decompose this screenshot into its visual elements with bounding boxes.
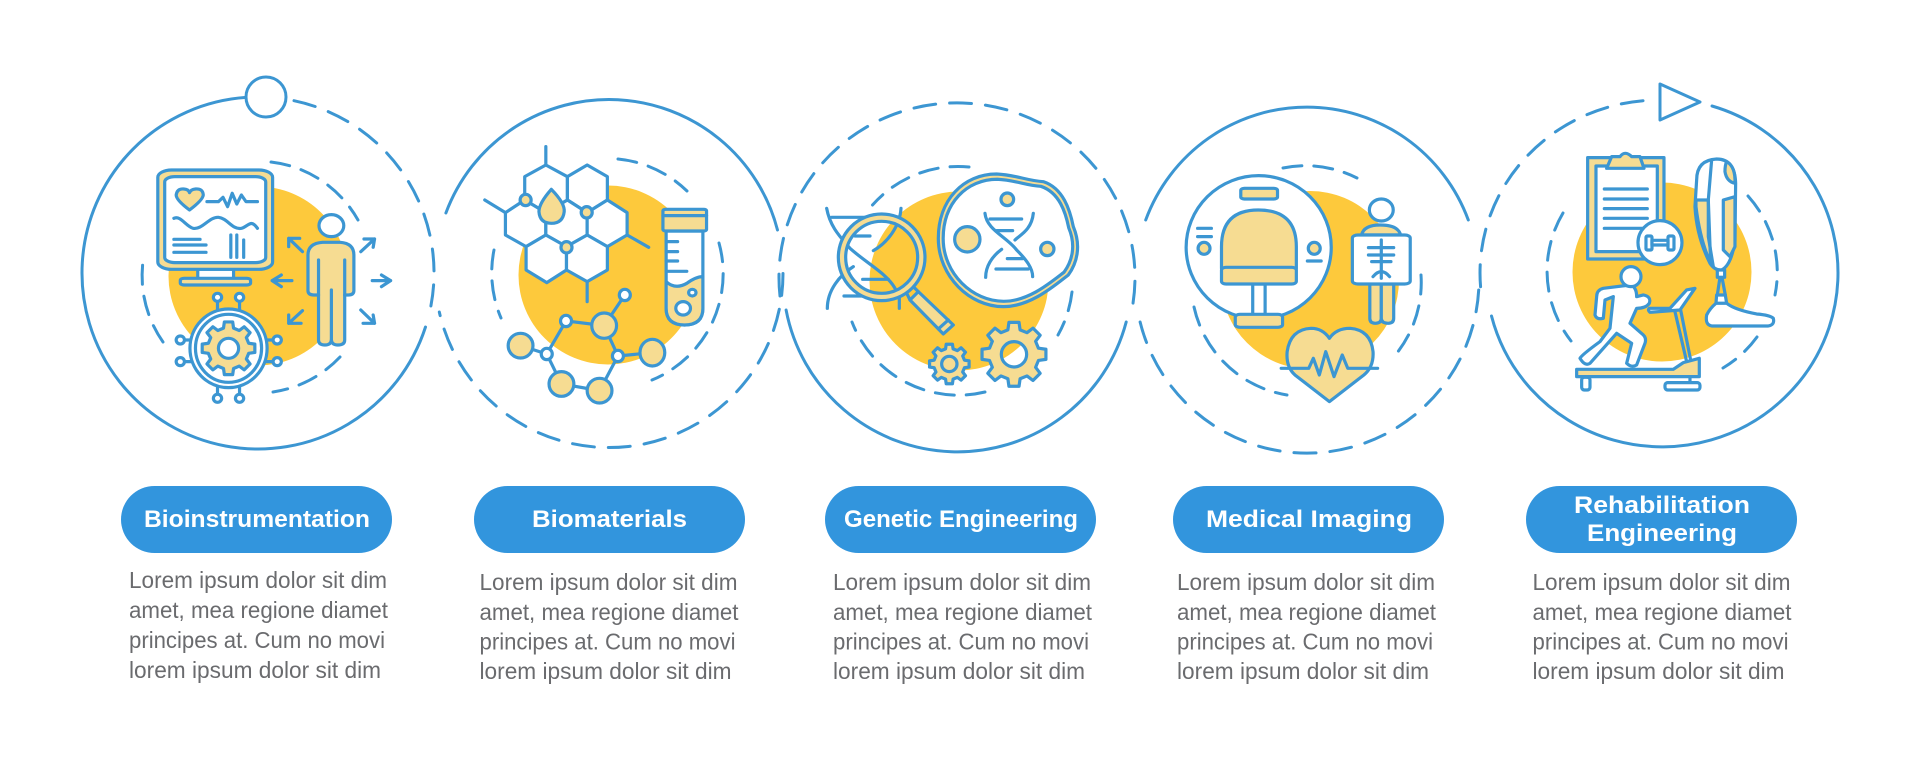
icon: hexagon lattice <box>485 147 649 302</box>
icon: clipboard, treadmill and prosthesis <box>1577 153 1774 390</box>
icon: treadmill runner <box>1577 267 1700 390</box>
end marker triangle <box>1660 84 1700 120</box>
outer ring <box>82 97 434 449</box>
text block: Genetic Engineering <box>833 569 1092 684</box>
yellow blob <box>518 186 698 364</box>
text block: Medical Imaging: lorem ipsum dolor sit dim <box>1177 658 1429 684</box>
heading: Genetic Engineering <box>825 486 1096 553</box>
panel: medical imaging circle <box>1140 107 1479 453</box>
heading: Bioinstrumentation <box>121 486 392 553</box>
heading: Rehabilitation Engineering: Engineering <box>1587 520 1737 547</box>
heading: Rehabilitation Engineering <box>1526 486 1797 553</box>
text block: Rehabilitation Engineering <box>1532 569 1792 684</box>
inner dashed ring <box>142 162 358 392</box>
text block: Genetic Engineering: Lorem ipsum dolor sit dim <box>833 569 1091 595</box>
outer ring <box>1140 107 1479 453</box>
outer ring <box>1480 101 1838 447</box>
outer ring <box>779 103 1135 452</box>
text block: Biomaterials: Lorem ipsum dolor sit dim <box>480 569 738 595</box>
text block: Genetic Engineering: amet, mea regione diamet <box>833 599 1092 625</box>
text block: Rehabilitation Engineering: Lorem ipsum dolor sit dim <box>1532 569 1790 595</box>
text block: Medical Imaging <box>1177 569 1436 684</box>
icon: heart with pulse <box>1281 328 1378 402</box>
icon: gear chip <box>176 293 281 402</box>
inner dashed ring <box>1194 166 1421 395</box>
icon: magnifier <box>838 214 953 334</box>
icon: x-ray person <box>1352 199 1410 323</box>
text block: Bioinstrumentation: amet, mea regione diamet <box>129 597 388 623</box>
panel: biomaterials circle <box>439 100 783 448</box>
icon: person <box>308 215 354 345</box>
icon: hexagons, test tube and molecule <box>485 147 707 403</box>
icon: scanner, x-ray and heart <box>1186 176 1410 402</box>
heading: Genetic Engineering: Genetic Engineering <box>844 506 1078 533</box>
text block: Bioinstrumentation: Lorem ipsum dolor sit dim <box>129 567 387 593</box>
text block: Medical Imaging: Lorem ipsum dolor sit dim <box>1177 569 1435 595</box>
icon: test tube <box>663 209 707 325</box>
heading: Rehabilitation Engineering: Rehabilitation <box>1574 492 1750 519</box>
icon: monitor <box>158 170 273 285</box>
icon: gears <box>928 320 1048 388</box>
heading: Bioinstrumentation: Bioinstrumentation <box>144 506 370 533</box>
yellow blob <box>870 192 1048 370</box>
text block: Rehabilitation Engineering: principes at. Cum no movi <box>1532 628 1788 654</box>
panel: rehabilitation engineering circle <box>1480 84 1838 447</box>
icon: monitoring equipment, person and chip <box>158 170 391 402</box>
text block: Biomaterials: amet, mea regione diamet <box>480 599 739 625</box>
yellow blob <box>1221 191 1399 369</box>
inner dashed ring <box>492 159 723 380</box>
text block: Medical Imaging: principes at. Cum no movi <box>1177 628 1433 654</box>
text block: Biomaterials: lorem ipsum dolor sit dim <box>480 658 732 684</box>
text block: Biomaterials: principes at. Cum no movi <box>480 628 736 654</box>
yellow blob <box>168 186 348 366</box>
heading: Biomaterials: Biomaterials <box>532 506 687 533</box>
heading: Medical Imaging <box>1173 486 1444 553</box>
heading: Biomaterials <box>474 486 745 553</box>
start marker circle <box>246 77 286 117</box>
text block: Biomaterials <box>480 569 739 684</box>
yellow blob <box>1572 182 1752 362</box>
icon: MRI scanner <box>1186 176 1331 327</box>
icon: clipboard with dumbbell <box>1588 153 1682 265</box>
text block: Genetic Engineering: principes at. Cum no movi <box>833 628 1089 654</box>
panel: bioinstrumentation circle <box>82 77 434 449</box>
icon: DNA strand <box>827 208 901 308</box>
text block: Rehabilitation Engineering: amet, mea regione diamet <box>1532 599 1792 625</box>
icon: molecule <box>508 289 665 403</box>
icon: arrows around person <box>272 238 391 323</box>
text block: Medical Imaging: amet, mea regione diamet <box>1177 599 1436 625</box>
outer ring <box>439 100 783 448</box>
text block: Rehabilitation Engineering: lorem ipsum dolor sit dim <box>1532 658 1784 684</box>
heading: Medical Imaging: Medical Imaging <box>1206 506 1412 533</box>
text block: Bioinstrumentation <box>129 567 388 683</box>
icon: DNA, magnifier, cell and gears <box>827 174 1078 386</box>
inner dashed ring <box>1547 196 1777 368</box>
inner dashed ring <box>852 166 1072 395</box>
panel: genetic engineering circle <box>779 103 1135 452</box>
icon: prosthetic leg <box>1695 159 1774 326</box>
icon: cell with DNA <box>938 174 1078 307</box>
text block: Genetic Engineering: lorem ipsum dolor sit dim <box>833 658 1085 684</box>
text block: Bioinstrumentation: principes at. Cum no movi <box>129 627 385 653</box>
text block: Bioinstrumentation: lorem ipsum dolor sit dim <box>129 657 381 683</box>
